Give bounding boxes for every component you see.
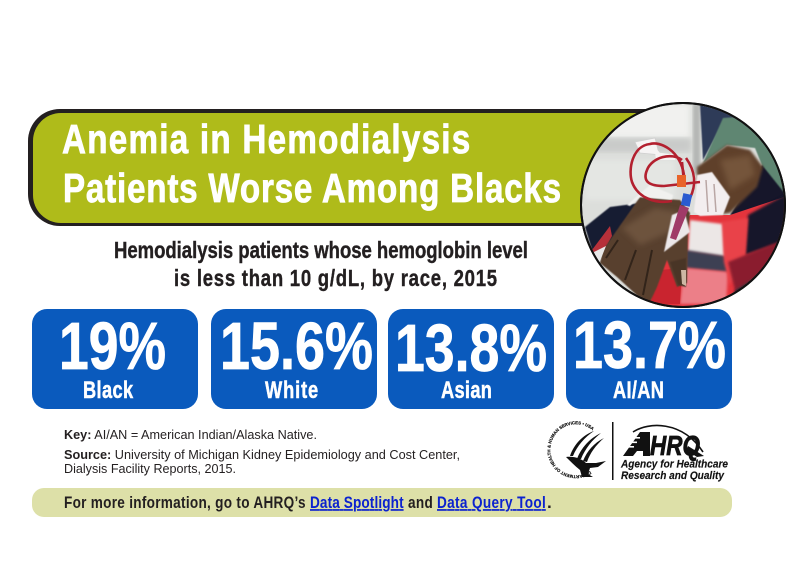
more information bar: and	[408, 494, 433, 512]
logo: AHRQ: Agency for Healthcare	[620, 458, 728, 470]
more information bar: Data Spotlight	[310, 494, 404, 512]
key note: Key: AI/AN = American Indian/Alaska Native.	[64, 428, 317, 442]
stat card: Black 19%	[32, 309, 198, 409]
more information bar: For more information, go to AHRQ’s	[64, 494, 306, 512]
hand	[600, 197, 690, 302]
tape and bandages	[694, 172, 730, 216]
title text: Anemia in Hemodialysis	[62, 116, 470, 162]
stat card: Asian 13.8%	[388, 309, 554, 409]
blanket	[644, 197, 784, 306]
stat card: Asian 13.8%: Asian	[441, 377, 492, 404]
stat card: White 15.6%	[211, 309, 377, 409]
more information bar	[32, 488, 732, 517]
subtitle	[114, 238, 528, 292]
photo: dialysis patient's hand with tubing	[580, 100, 790, 310]
source note: Dialysis Facility Reports, 2015.	[64, 462, 236, 476]
stat card: Asian 13.8%: 13.8%	[395, 311, 547, 386]
stat card: AI/AN 13.7%: 13.7%	[573, 308, 726, 383]
stat card: AI/AN 13.7%: AI/AN	[613, 377, 664, 404]
stat card: Black 19%: 19%	[59, 309, 166, 384]
source note: Source: University of Michigan Kidney Epidemiology and Cost Center,	[64, 448, 460, 462]
title text: Patients Worse Among Blacks	[63, 165, 561, 211]
sleeve and arm	[699, 106, 748, 160]
more information bar: Data Query Tool	[437, 494, 546, 512]
eagle	[566, 431, 606, 477]
tubing	[631, 143, 700, 202]
stat card: White 15.6%: 15.6%	[220, 309, 373, 384]
logo: AHRQ	[620, 425, 728, 482]
stat card: Black 19%: Black	[83, 377, 133, 404]
subtitle: is less than 10 g/dL, by race, 2015	[174, 266, 497, 292]
logo divider	[612, 422, 614, 480]
stat card: AI/AN 13.7%	[566, 308, 732, 409]
title banner	[28, 109, 698, 226]
logo: HHS seal: DEPARTMENT OF HEALTH & HUMAN SERVICES • USA	[547, 421, 594, 478]
logo: AHRQ: Research and Quality	[621, 470, 725, 482]
subtitle: Hemodialysis patients whose hemoglobin level	[114, 238, 528, 264]
source note	[64, 448, 460, 476]
logo: AHRQ: HRQ	[650, 430, 700, 461]
more information bar: .	[547, 493, 552, 512]
title text	[62, 116, 561, 211]
stat card: White 15.6%: White	[265, 377, 318, 404]
